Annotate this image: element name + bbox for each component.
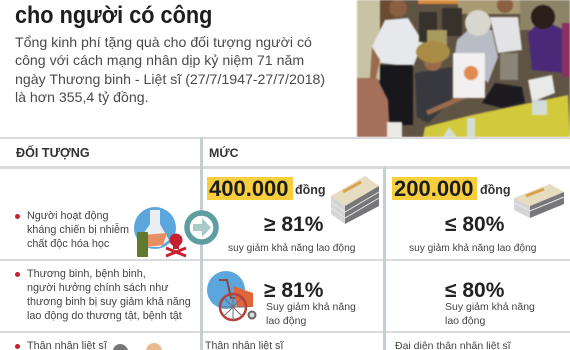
icon: wheelchair xyxy=(207,271,256,322)
icon: stack of money xyxy=(331,176,379,224)
caption: suy giảm khả năng lao động xyxy=(228,243,355,254)
row 2 text: lao động do thương tật, bệnh tật xyxy=(27,310,182,322)
photo: officials presenting gifts xyxy=(356,0,570,137)
amount 200.000 đồng: 200.000 xyxy=(394,176,474,201)
row 1 cell 400.000 xyxy=(207,176,355,254)
row 2 text: thương binh bị suy giảm khả năng xyxy=(27,296,191,308)
row 2 text: người hưởng chính sách như xyxy=(27,282,168,294)
intro text: công với cách mạng nhân dịp kỷ niệm 71 năm xyxy=(15,52,304,68)
icon: small stack of money xyxy=(514,184,564,218)
unit: đồng xyxy=(295,183,326,197)
icon: arrow circle xyxy=(184,210,219,245)
unit: đồng xyxy=(480,183,511,197)
column heading: đối tượng: ĐỐI TƯỢNG xyxy=(16,146,90,160)
row 2 percent left: ≥ 81% xyxy=(264,279,323,302)
row 1 bullet xyxy=(15,214,20,219)
row 2 caption left xyxy=(266,301,356,327)
icon: chemical flask and skull xyxy=(134,207,186,258)
column heading: mức: MỨC xyxy=(209,146,239,160)
title: cho người có công xyxy=(15,2,212,29)
row 1 text: kháng chiến bị nhiễm xyxy=(27,224,129,236)
row 2 caption right: Suy giảm khả năng xyxy=(445,301,535,313)
row 2 text xyxy=(27,268,191,322)
row 2 caption right: lao động xyxy=(445,315,485,327)
table grid lines xyxy=(0,137,570,139)
intro text: ngày Thương binh - Liệt sĩ (27/7/1947-27/7/2018) xyxy=(15,71,325,87)
caption: suy giảm khả năng lao động xyxy=(409,243,536,254)
row 1 text: chất độc hóa học xyxy=(27,238,109,250)
row 1 cell 200.000 xyxy=(392,176,536,254)
intro text: Tổng kinh phí tặng quà cho đối tượng người có xyxy=(15,34,312,50)
row 3 bullet xyxy=(15,344,20,349)
row 1 text: Người hoạt động xyxy=(27,210,109,222)
percent: ≤ 80% xyxy=(445,213,504,236)
row 2 percent right: ≤ 80% xyxy=(445,279,504,302)
row 1 text xyxy=(27,210,129,250)
percent: ≥ 81% xyxy=(264,213,323,236)
row 2 bullet xyxy=(15,272,20,277)
intro text xyxy=(15,34,325,105)
row 2 caption left: Suy giảm khả năng xyxy=(266,301,356,313)
row 2 caption right xyxy=(445,301,535,327)
icon: row 3 people heads xyxy=(113,343,162,350)
row 2 text: Thương binh, bệnh binh, xyxy=(27,268,146,280)
amount 400.000 đồng: 400.000 xyxy=(209,176,289,201)
row 2 caption left: lao động xyxy=(266,315,306,327)
intro text: là hơn 355,4 tỷ đồng. xyxy=(15,89,148,105)
